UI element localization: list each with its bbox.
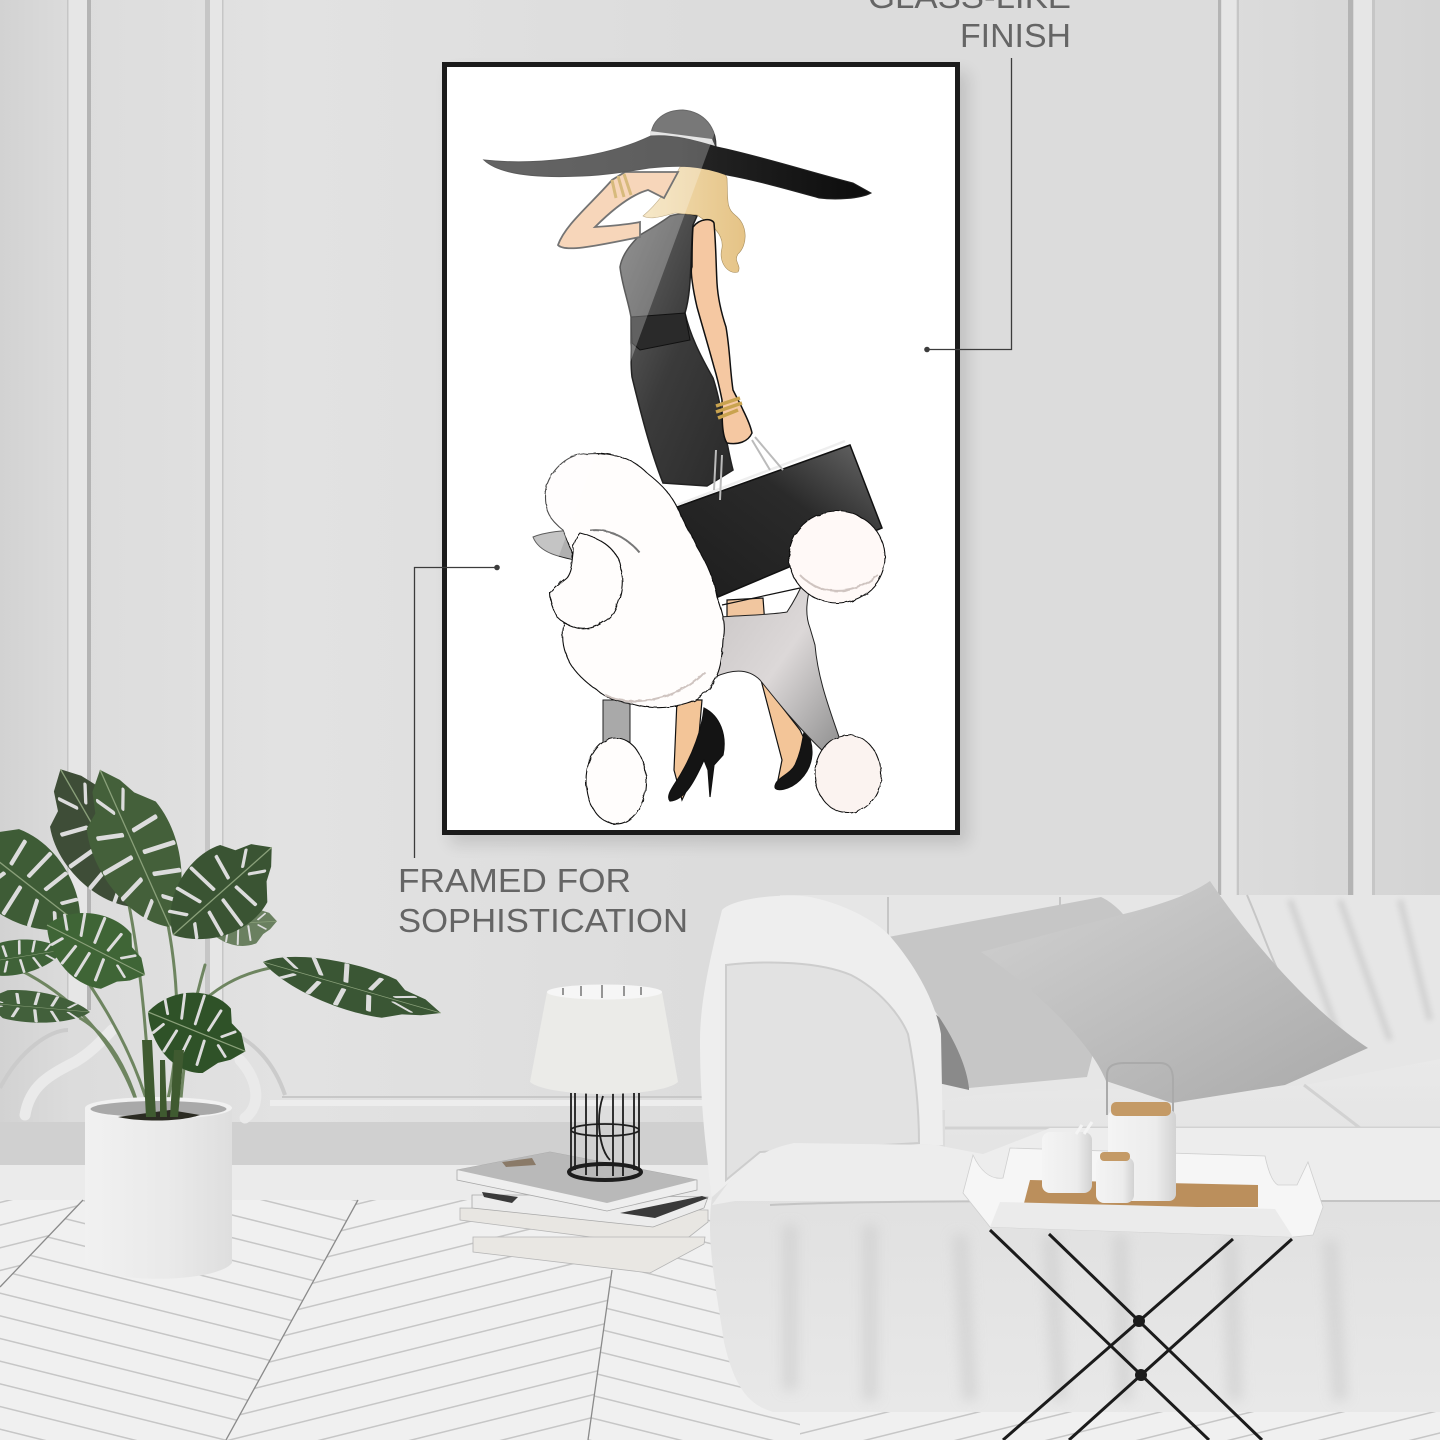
poodle	[533, 453, 885, 824]
tray	[963, 1148, 1323, 1237]
dress	[620, 214, 733, 486]
fur shading	[590, 530, 878, 701]
sofa arm	[700, 896, 943, 1210]
herringbone floor	[0, 1200, 1440, 1440]
woman's legs and shoes	[669, 680, 812, 801]
hair	[643, 165, 745, 272]
shadow gap	[917, 1000, 969, 1090]
hanging arm	[691, 220, 752, 444]
sofa back	[780, 895, 1440, 1110]
books	[457, 1152, 708, 1273]
grey body and tail	[715, 578, 840, 755]
gold bangles	[716, 398, 742, 418]
face and raised arm	[558, 172, 678, 248]
callout: framed for sophistication: SOPHISTICATION	[398, 902, 688, 939]
bangles on raised arm	[612, 174, 631, 198]
sofa	[700, 881, 1440, 1412]
sofa arm panel	[726, 962, 919, 1180]
left pillow	[867, 897, 1127, 1088]
snout	[533, 530, 585, 562]
callout: glass-like finish: FINISH	[960, 17, 1071, 54]
small jar	[1096, 1157, 1134, 1203]
plant stems	[20, 900, 290, 1112]
sofa front	[710, 1128, 1440, 1412]
front leg	[603, 700, 630, 746]
baseboard	[0, 1165, 720, 1200]
tall canister with handle	[1107, 1063, 1173, 1115]
table legs	[990, 1230, 1292, 1440]
head and chest fluff	[545, 453, 724, 708]
cup	[1042, 1132, 1092, 1193]
front paw	[586, 738, 646, 824]
woman's far leg	[727, 598, 765, 625]
lamp shade	[530, 992, 678, 1094]
callout: framed for sophistication	[398, 565, 688, 939]
tray table	[963, 1063, 1323, 1440]
right pillow	[981, 881, 1368, 1103]
hat	[484, 110, 871, 199]
frame drop shadow	[450, 72, 968, 844]
tail pom	[789, 511, 885, 603]
black frame	[444, 64, 958, 832]
sofa pleats	[790, 1225, 1340, 1400]
callout: glass-like finish	[868, 0, 1071, 352]
potted monstera plant	[0, 747, 447, 1279]
wood board	[1023, 1180, 1258, 1207]
shopping bag	[677, 437, 882, 605]
framed artwork	[444, 64, 958, 832]
belt	[631, 313, 690, 350]
seat cushions	[945, 1059, 1440, 1180]
monstera leaves	[0, 747, 447, 1088]
stems entering pot	[142, 1040, 184, 1117]
rear paw	[815, 735, 881, 813]
glass reflection	[447, 67, 739, 830]
ear	[550, 533, 622, 629]
callout: framed for sophistication: FRAMED FOR	[398, 862, 631, 899]
lamp base cage	[569, 1093, 641, 1180]
wall panel mouldings	[0, 0, 1375, 1166]
lamp and stacked books	[457, 984, 708, 1273]
pot	[85, 1108, 232, 1279]
